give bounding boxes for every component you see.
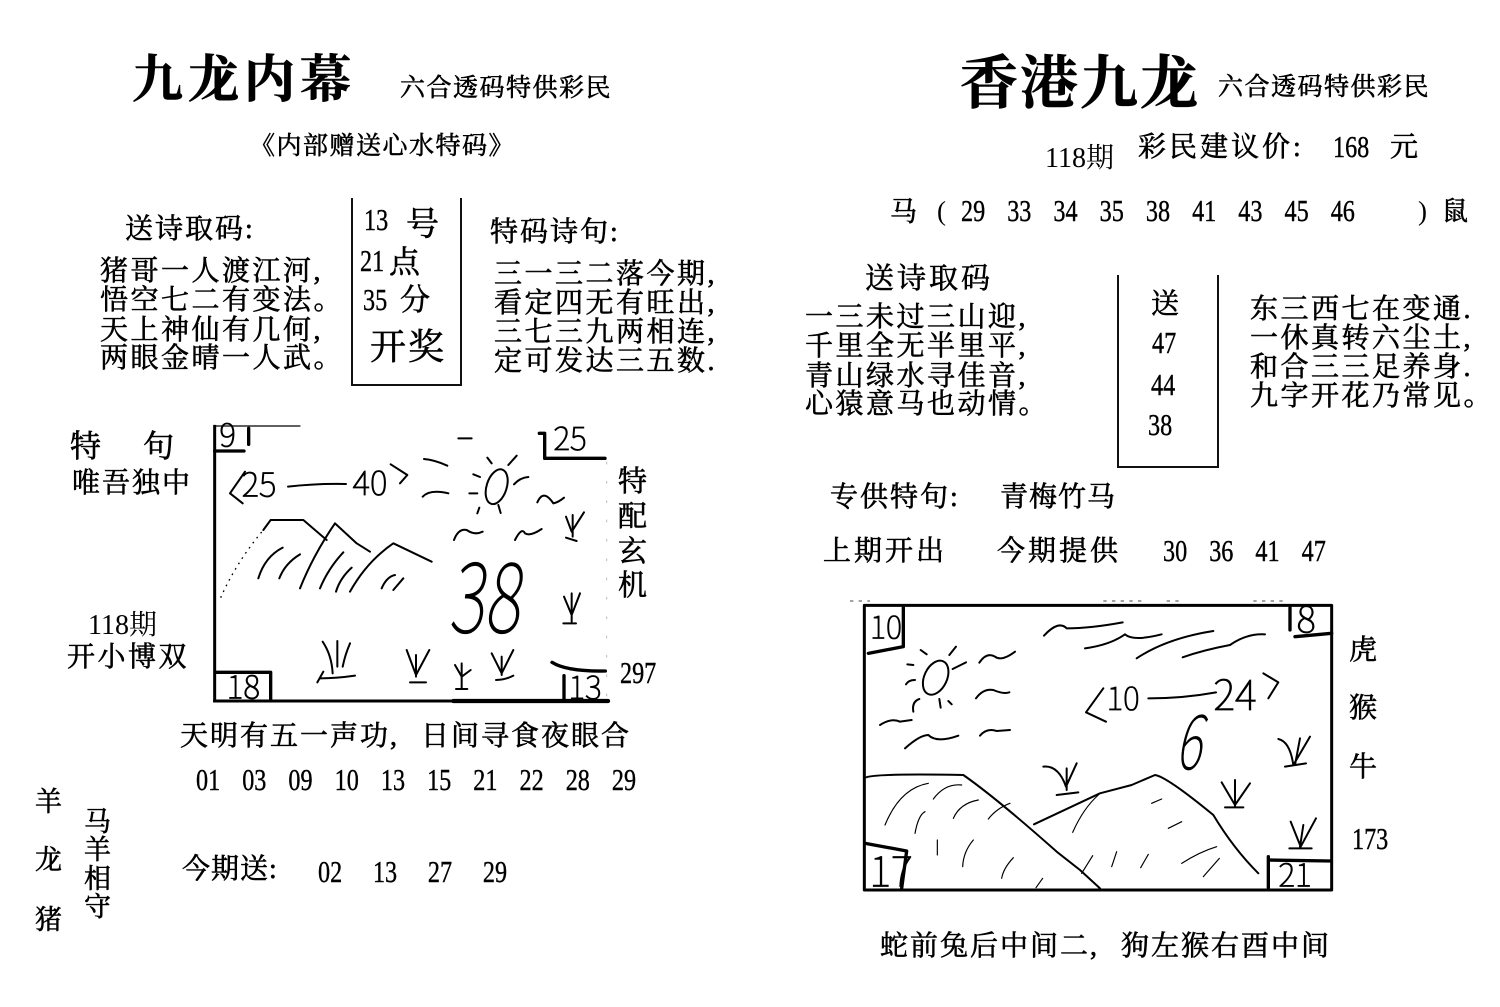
sun and squiggles bbox=[880, 647, 1015, 748]
poem: left verse bbox=[805, 302, 1049, 420]
vertical text: 马羊相守: 马 bbox=[84, 807, 111, 837]
corner number 25 bbox=[539, 414, 605, 460]
zodiac number row: 马 bbox=[890, 197, 917, 227]
label: 上期开出: 上期开出 bbox=[823, 536, 947, 567]
riddle line: 天明有五一声功, 日间寻食夜眼合 bbox=[180, 721, 631, 752]
subtitle: 六合透码特供彩民: 六合透码特供彩民 bbox=[400, 75, 612, 102]
vertical text: 马羊相守 bbox=[84, 807, 111, 922]
number 38: 38 bbox=[444, 522, 535, 660]
subtitle: 六合透码特供彩民: 六合透码特供彩民 bbox=[1218, 74, 1430, 101]
price line: 168 bbox=[1333, 129, 1369, 164]
poem: right verse: 九字开花乃常见。 bbox=[1250, 381, 1494, 412]
sun and squiggles bbox=[423, 438, 564, 540]
corner number 21 bbox=[1268, 851, 1331, 897]
vertical text: 羊龙猪: 猪 bbox=[35, 905, 62, 935]
box: draw time: 号 bbox=[406, 207, 439, 243]
vertical text: 羊龙猪: 龙 bbox=[35, 845, 62, 875]
number row: 01 03 09 10 13 15 21 22 28 29 bbox=[196, 762, 636, 797]
corner number 8 bbox=[1290, 589, 1332, 643]
numbers: 30 36 41 47: 30 36 41 47 bbox=[1163, 533, 1326, 568]
poem: left verse: 两眼金晴一人武。 bbox=[100, 343, 344, 374]
poem: right verse: 定可发达三五数. bbox=[494, 346, 717, 377]
box: draw time bbox=[351, 198, 462, 386]
number 297: 297 bbox=[620, 655, 656, 690]
mountains bbox=[865, 775, 1258, 888]
label: 唯吾独中: 唯吾独中 bbox=[72, 468, 192, 499]
vertical text: 特配玄机: 机 bbox=[618, 570, 647, 602]
vertical text: 特配玄机 bbox=[618, 466, 647, 602]
zodiac number row: 鼠 bbox=[1442, 197, 1468, 226]
corner number 18: 18 bbox=[227, 662, 260, 708]
vertical text: 虎猴牛 bbox=[1349, 635, 1377, 783]
vertical text: 特配玄机: 玄 bbox=[618, 536, 647, 568]
range mark 25 to 40: 40 bbox=[353, 456, 387, 505]
vertical text: 马羊相守: 羊 bbox=[84, 835, 111, 865]
sketch: sun, mountains and grass with number 38 bbox=[213, 411, 610, 709]
corner number 10: 10 bbox=[870, 602, 902, 647]
box: draw time: 35 bbox=[363, 282, 387, 317]
box: gift numbers: 38 bbox=[1148, 407, 1172, 442]
range mark 25 to 40 bbox=[230, 456, 407, 507]
mountains bbox=[221, 520, 432, 598]
poem: left verse: 千里全无半里平, bbox=[805, 331, 1028, 362]
sketch: sun, clouds and mountains with number 6 bbox=[850, 589, 1334, 899]
grass tufts bbox=[317, 512, 584, 689]
number 173: 173 bbox=[1352, 821, 1388, 856]
poem: right verse bbox=[494, 258, 717, 377]
panel: left sheet 九龙内幕 bbox=[35, 38, 717, 935]
zodiac number row bbox=[890, 193, 1468, 228]
numbers: 02 13 27 29: 02 13 27 29 bbox=[318, 854, 507, 889]
heading: 特码诗句: 特码诗句: bbox=[490, 217, 620, 248]
vertical text: 羊龙猪: 羊 bbox=[35, 787, 62, 817]
number 6: 6 bbox=[1170, 685, 1218, 791]
vertical text: 马羊相守: 守 bbox=[84, 892, 111, 922]
label: 今期提供: 今期提供 bbox=[997, 536, 1121, 567]
corner number 13 bbox=[552, 662, 605, 709]
range mark 25 to 40: 25 bbox=[242, 458, 276, 507]
poem: right verse bbox=[1250, 294, 1494, 412]
price line bbox=[1138, 129, 1418, 164]
vertical text: 马羊相守: 相 bbox=[84, 864, 111, 894]
zodiac number row: ( bbox=[937, 196, 946, 226]
corner number 18 bbox=[216, 662, 271, 708]
price line: 元 bbox=[1390, 132, 1418, 163]
clouds bbox=[1044, 622, 1265, 658]
corner number 8: 8 bbox=[1297, 589, 1316, 643]
zodiac number row: 29 33 34 35 38 41 43 45 46 bbox=[961, 193, 1355, 228]
vertical text: 虎猴牛: 虎 bbox=[1349, 635, 1377, 666]
box: gift numbers: 送 bbox=[1151, 289, 1179, 320]
corner number 21: 21 bbox=[1278, 851, 1312, 897]
poem: right verse: 三七三九两相连, bbox=[494, 317, 717, 348]
poem: left verse: 猪哥一人渡江河, bbox=[100, 256, 323, 287]
corner number 9: 9 bbox=[219, 411, 236, 457]
poem: left verse: 天上神仙有几何, bbox=[100, 315, 323, 346]
poem: left verse: 悟空七二有变法。 bbox=[100, 285, 344, 316]
box: draw time: 开奖 bbox=[370, 327, 446, 367]
issue label: 118期: 118期 bbox=[1045, 143, 1114, 174]
box: draw time: 21 bbox=[360, 243, 384, 278]
tagline: 内部赠送心水特码: 《内部赠送心水特码》 bbox=[250, 133, 515, 160]
box: draw time: 点 bbox=[389, 245, 420, 280]
panel: right sheet 香港九龙 bbox=[805, 36, 1494, 962]
range mark 10 to 24 bbox=[1086, 662, 1278, 722]
label: 今期送: 今期送: bbox=[182, 854, 278, 885]
box: gift numbers bbox=[1117, 275, 1219, 468]
grass tufts bbox=[1043, 737, 1316, 848]
poem: right verse: 看定四无有旺出, bbox=[494, 288, 717, 319]
poem: left verse bbox=[100, 256, 344, 374]
label: 特句: 特句 bbox=[70, 429, 216, 464]
title: 九龙内幕: 九龙内幕 bbox=[132, 38, 356, 112]
label: 青梅竹马: 青梅竹马 bbox=[1000, 482, 1116, 513]
poem: left verse: 心猿意马也动情。 bbox=[805, 389, 1049, 420]
corner number 25: 25 bbox=[553, 414, 587, 460]
zodiac number row: ) bbox=[1418, 196, 1427, 226]
corner number 17: 17 bbox=[869, 839, 913, 899]
range mark 10 to 24: 10 bbox=[1107, 674, 1140, 720]
heading: 送诗取码: 送诗取码 bbox=[865, 263, 993, 295]
box: draw time: 分 bbox=[400, 284, 430, 317]
corner number 9 bbox=[215, 411, 249, 457]
vertical text: 特配玄机: 特 bbox=[618, 466, 647, 498]
poem: right verse: 东三西七在变通. bbox=[1250, 294, 1473, 325]
label: 专供特句: 专供特句: bbox=[830, 482, 960, 513]
title: 香港九龙: 香港九龙 bbox=[960, 36, 1200, 120]
vertical text: 虎猴牛: 牛 bbox=[1349, 752, 1377, 783]
poem: left verse: 一三未过三山迎, bbox=[805, 302, 1028, 333]
heading: 送诗取码: 送诗取码: bbox=[125, 214, 255, 245]
poem: right verse: 一休真转六尘土, bbox=[1250, 323, 1473, 354]
corner number 13: 13 bbox=[568, 663, 602, 709]
poem: right verse: 和合三三足养身. bbox=[1250, 352, 1473, 383]
label: 118期: 118期 bbox=[88, 610, 157, 641]
poem: right verse: 三一三二落今期, bbox=[494, 259, 717, 290]
box: gift numbers: 47 bbox=[1152, 325, 1176, 360]
box: gift numbers: 44 bbox=[1151, 367, 1175, 402]
vertical text: 特配玄机: 配 bbox=[618, 501, 647, 533]
vertical text: 虎猴牛: 猴 bbox=[1349, 693, 1377, 724]
poem: left verse: 青山绿水寻佳音, bbox=[805, 361, 1028, 392]
riddle line: 蛇前兔后中间二, 狗左猴右酉中间 bbox=[880, 931, 1331, 962]
price line: 彩民建议价: bbox=[1138, 132, 1304, 163]
box: draw time: 13 bbox=[364, 202, 388, 237]
range mark 10 to 24: 24 bbox=[1213, 662, 1257, 722]
vertical text: 羊龙猪 bbox=[35, 787, 62, 935]
label: 开小博双: 开小博双 bbox=[67, 642, 189, 673]
